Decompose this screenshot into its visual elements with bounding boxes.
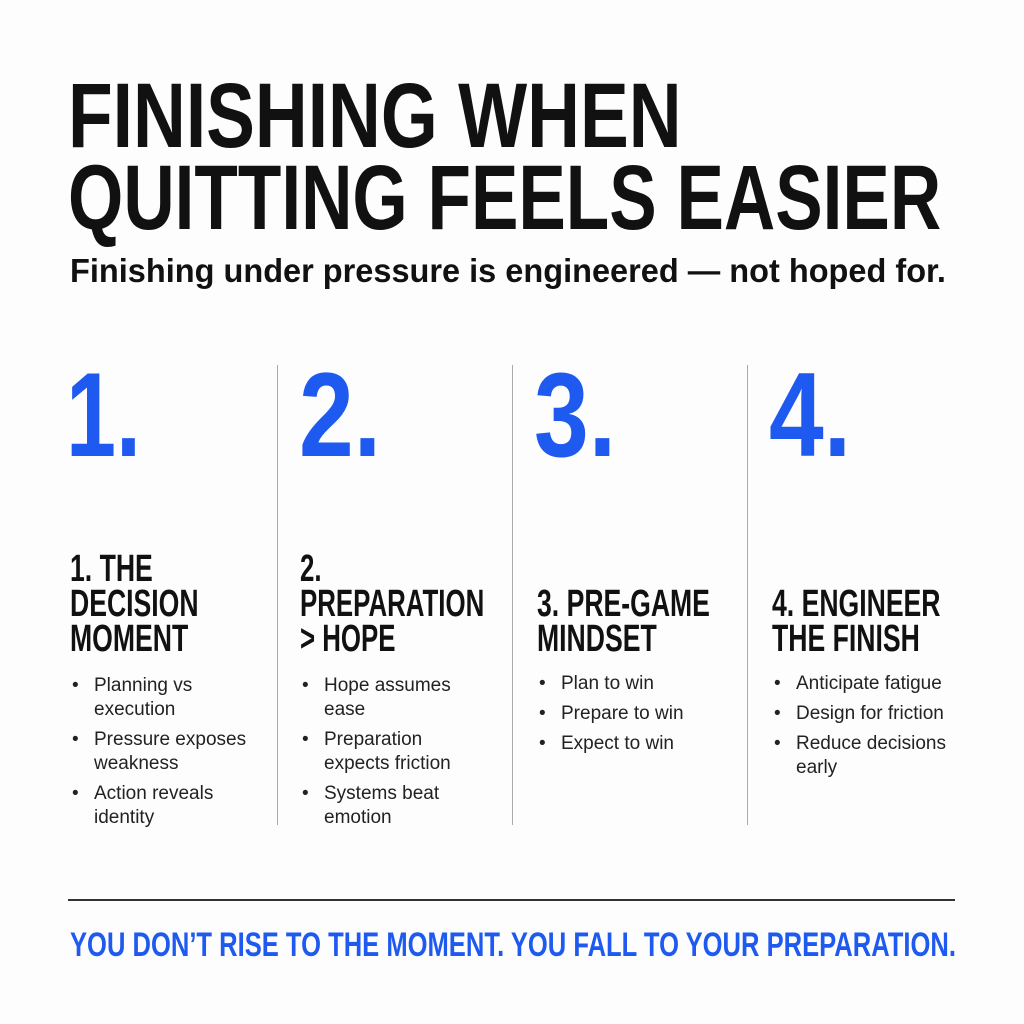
number 3: 3.	[534, 348, 616, 482]
bullets 1: identity	[94, 807, 154, 828]
bullets 4	[774, 673, 946, 778]
title: QUITTING FEELS EASIER	[68, 147, 941, 249]
number 2: 2.	[299, 348, 381, 482]
bullets 2: emotion	[324, 807, 392, 828]
bullets 2	[302, 675, 451, 828]
heading 4: THE FINISH	[772, 618, 920, 660]
bullets 3: Plan to win	[561, 673, 654, 694]
bullets 1: Pressure exposes	[94, 729, 246, 750]
heading 2: PREPARATION	[300, 583, 484, 625]
bullets 4: Reduce decisions	[796, 733, 946, 754]
heading 4	[772, 583, 941, 660]
heading 2	[300, 548, 484, 660]
subtitle: Finishing under pressure is engineered — not hoped for.	[70, 252, 946, 289]
heading 2: 2.	[300, 548, 322, 590]
title	[68, 65, 941, 249]
heading 1: MOMENT	[70, 618, 188, 660]
heading 3	[537, 583, 710, 660]
bullets 1	[72, 675, 246, 828]
heading 3: 3. PRE-GAME	[537, 583, 710, 625]
bullets 3: Prepare to win	[561, 703, 684, 724]
bullets 1: weakness	[94, 753, 178, 774]
heading 2: > HOPE	[300, 618, 396, 660]
heading 1: 1. THE	[70, 548, 153, 590]
bullets 3: Expect to win	[561, 733, 674, 754]
bullets 1: execution	[94, 699, 175, 720]
bullets 1: Planning vs	[94, 675, 192, 696]
number 4: 4.	[769, 348, 851, 482]
bullets 1: Action reveals	[94, 783, 213, 804]
bullets 3	[540, 673, 684, 754]
bullets 2: Hope assumes	[324, 675, 451, 696]
number 1: 1.	[66, 348, 141, 482]
heading 4: 4. ENGINEER	[772, 583, 941, 625]
heading 1: DECISION	[70, 583, 199, 625]
bullets 2: Preparation	[324, 729, 422, 750]
bullets 4: early	[796, 757, 837, 778]
bullets 2: ease	[324, 699, 365, 720]
title: FINISHING WHEN	[68, 65, 682, 167]
heading 3: MINDSET	[537, 618, 657, 660]
heading 1	[70, 548, 199, 660]
bullets 4: Design for friction	[796, 703, 944, 724]
footer tagline: YOU DON’T RISE TO THE MOMENT. YOU FALL TO YOUR PREPARATION.	[70, 926, 956, 964]
bullets 2: expects friction	[324, 753, 451, 774]
bullets 4: Anticipate fatigue	[796, 673, 942, 694]
bullets 2: Systems beat	[324, 783, 439, 804]
